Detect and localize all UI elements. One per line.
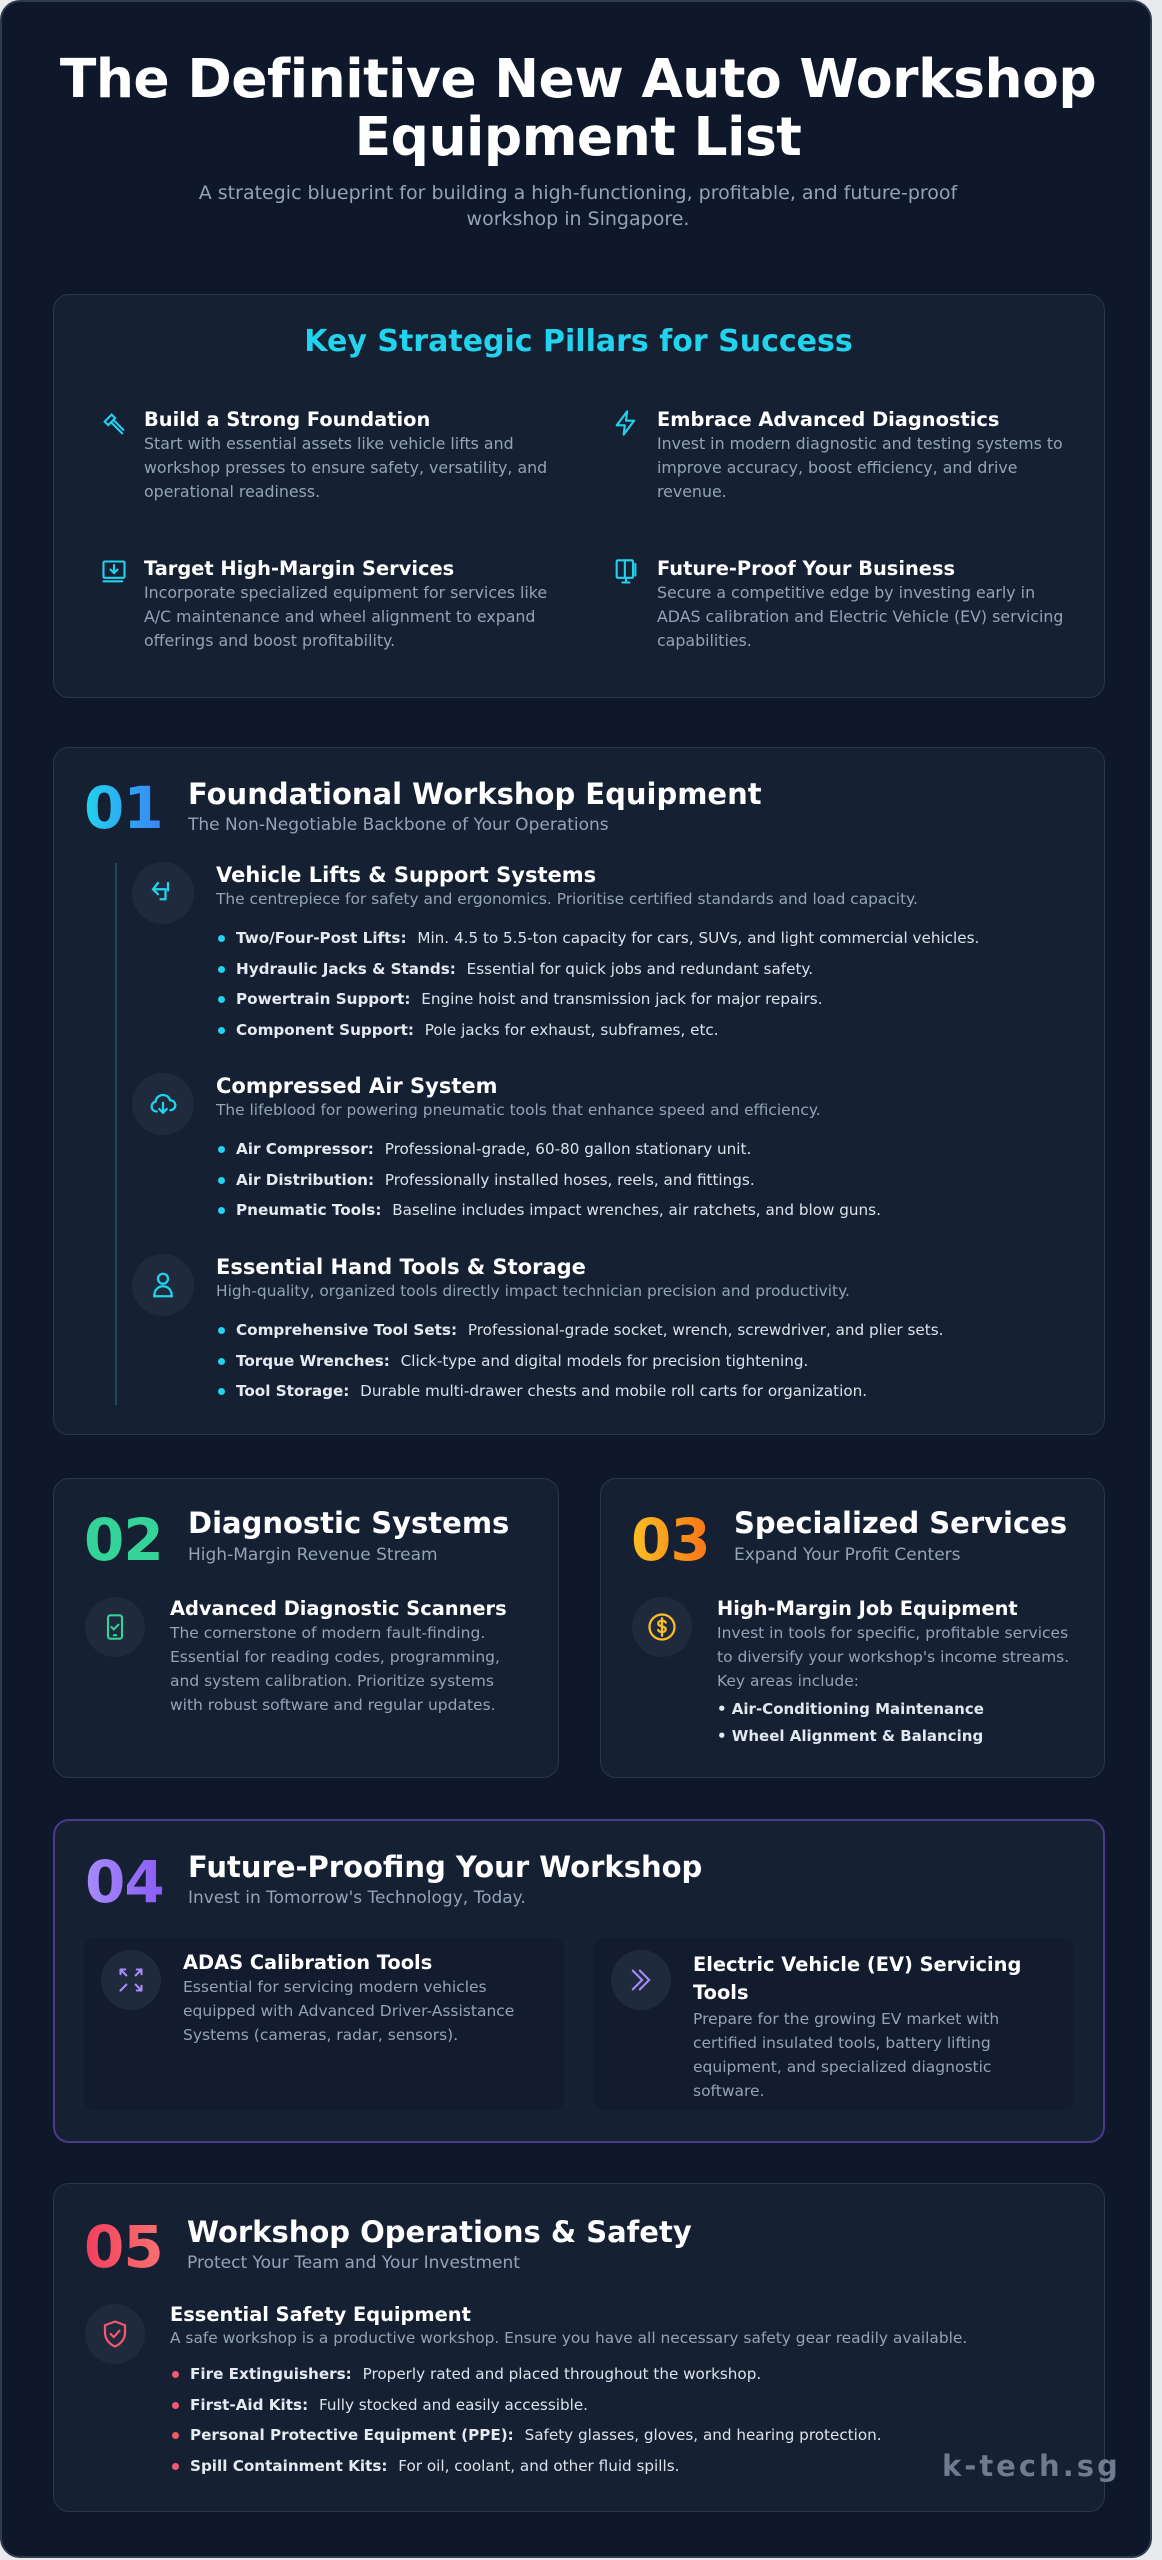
item: compressed air	[132, 1073, 881, 1219]
pillar: high-margin: Incorporate specialized equipment for services like A/C maintenance and wheel alignment to expand offerings and boost profitability.	[144, 583, 547, 650]
item: safety equipment: Fire Extinguishers: Properly rated and placed throughout the workshop.	[190, 2365, 761, 2383]
subtitle: A strategic blueprint for building a high-functioning, profitable, and future-proof workshop in Singapore.	[199, 182, 957, 230]
icon: phone	[85, 1597, 145, 1657]
item: hand tools: Comprehensive Tool Sets: Professional-grade socket, wrench, screwdriver, and plier sets.	[236, 1321, 943, 1339]
item: vehicle lifts: Two/Four-Post Lifts: Min. 4.5 to 5.5-ton capacity for cars, SUVs, and light commercial vehicles.	[236, 929, 979, 947]
item: vehicle lifts: Powertrain Support: Engine hoist and transmission jack for major repairs.	[236, 990, 823, 1008]
item: vehicle lifts: Hydraulic Jacks & Stands: Essential for quick jobs and redundant safety.	[236, 960, 813, 978]
icon: hammer	[103, 413, 124, 434]
section heading: Foundational Workshop Equipment	[188, 777, 762, 811]
item: compressed air: The lifeblood for powering pneumatic tools that enhance speed and efficiency.	[216, 1101, 821, 1119]
item: high-margin equipment: Invest in tools for specific, profitable services to diversify your workshop's income streams. Key areas include:	[717, 1624, 1069, 1690]
pillar: high-margin	[102, 557, 547, 650]
panel: 01 foundational	[53, 747, 1105, 1435]
panel: 02 diagnostic	[53, 1478, 559, 1778]
title: The Definitive New Auto Workshop	[60, 47, 1096, 110]
card: EV: Prepare for the growing EV market with certified insulated tools, battery lifting equipment, and specialized diagnostic software.	[693, 2010, 999, 2100]
item: vehicle lifts	[132, 862, 979, 1038]
item: scanners	[85, 1597, 507, 1714]
item: high-margin equipment: High-Margin Job Equipment	[717, 1597, 1018, 1620]
pillar: diagnostics	[616, 408, 1063, 501]
item: vehicle lifts: Component Support: Pole jacks for exhaust, subframes, etc.	[236, 1020, 719, 1038]
item: compressed air: Air Distribution: Professionally installed hoses, reels, and fittings.	[236, 1170, 755, 1188]
item: safety equipment: Spill Containment Kits: For oil, coolant, and other fluid spills.	[190, 2456, 679, 2474]
number 03: 03	[631, 1506, 710, 1574]
item: compressed air: Air Compressor: Professional-grade, 60-80 gallon stationary unit.	[236, 1140, 751, 1158]
item: safety equipment: Essential Safety Equipment	[170, 2303, 471, 2326]
card: ADAS	[84, 1938, 564, 2110]
pillar: foundation: Start with essential assets like vehicle lifts and workshop presses to ensure safety, versatility, and operational readiness.	[144, 434, 547, 501]
pillar: foundation	[103, 408, 547, 501]
panel: 03 specialized	[600, 1478, 1105, 1778]
item: safety equipment: First-Aid Kits: Fully stocked and easily accessible.	[190, 2396, 588, 2414]
icon: monitor	[616, 559, 636, 584]
heading: Diagnostic Systems	[188, 1506, 509, 1540]
pillar: future-proof	[616, 557, 1063, 650]
item: high-margin equipment: • Wheel Alignment & Balancing	[717, 1727, 983, 1745]
heading: Specialized Services	[734, 1506, 1067, 1540]
panel: key strategic pillars	[53, 294, 1105, 698]
item: hand tools: Tool Storage: Durable multi-drawer chests and mobile roll carts for organization.	[236, 1382, 867, 1400]
pillar: diagnostics: Invest in modern diagnostic and testing systems to improve accuracy, boost efficiency, and drive revenue.	[657, 434, 1063, 501]
title: Equipment List	[355, 105, 801, 168]
icon: shield	[85, 2304, 145, 2364]
heading: Workshop Operations & Safety	[187, 2215, 692, 2249]
card: ADAS: Essential for servicing modern vehicles equipped with Advanced Driver-Assistance Systems (cameras, radar, sensors).	[183, 1978, 514, 2044]
item: high-margin equipment: • Air-Conditioning Maintenance	[717, 1700, 984, 1718]
watermark: k-tech.sg	[942, 2449, 1121, 2483]
pillar: high-margin: Target High-Margin Services	[144, 557, 454, 580]
item: scanners: Advanced Diagnostic Scanners	[170, 1597, 507, 1620]
icon: lightning	[616, 410, 636, 436]
pillar: future-proof: Secure a competitive edge by investing early in ADAS calibration and Electric Vehicle (EV) servicing capabilities.	[657, 583, 1063, 650]
icon: lift	[132, 862, 194, 924]
card: EV: Electric Vehicle (EV) Servicing Tools	[693, 1953, 1021, 2004]
item: safety equipment: Personal Protective Equipment (PPE): Safety glasses, gloves, and hearing protection.	[190, 2426, 882, 2444]
item: scanners: The cornerstone of modern fault-finding. Essential for reading codes, programming, and system calibration. Prioritize systems with robust software and regular updates.	[170, 1624, 500, 1714]
panel: 04 future-proofing	[53, 1819, 1105, 2143]
icon: dollar	[632, 1597, 692, 1657]
icon: screen	[102, 560, 126, 582]
pillar: foundation: Build a Strong Foundation	[144, 408, 430, 431]
icon: person	[132, 1254, 194, 1316]
pillars heading: Key Strategic Pillars for Success	[304, 324, 853, 359]
item: vehicle lifts: The centrepiece for safety and ergonomics. Prioritise certified standards and load capacity.	[216, 890, 918, 908]
pillar: future-proof: Future-Proof Your Business	[657, 557, 955, 580]
item: hand tools: Essential Hand Tools & Storage	[216, 1255, 586, 1279]
panel: 05 operations & safety	[53, 2183, 1105, 2512]
icon: cloud download	[132, 1073, 194, 1135]
item: safety equipment: A safe workshop is a productive workshop. Ensure you have all necessary safety gear readily available.	[170, 2329, 967, 2347]
heading: Future-Proofing Your Workshop	[188, 1850, 702, 1884]
item: hand tools: Torque Wrenches: Click-type and digital models for precision tightening.	[236, 1352, 808, 1370]
item: hand tools: High-quality, organized tools directly impact technician precision and productivity.	[216, 1282, 850, 1300]
icon: arrows	[101, 1950, 161, 2010]
number 05: 05	[84, 2213, 163, 2281]
item: hand tools	[132, 1254, 943, 1400]
icon: chevrons	[611, 1950, 671, 2010]
item: high-margin equipment	[632, 1597, 1069, 1745]
item: compressed air: Compressed Air System	[216, 1074, 498, 1098]
subtitle: Invest in Tomorrow's Technology, Today.	[188, 1888, 526, 1908]
item: compressed air: Pneumatic Tools: Baseline includes impact wrenches, air ratchets, and blow guns.	[236, 1201, 881, 1219]
title	[60, 47, 1096, 168]
subtitle: Protect Your Team and Your Investment	[187, 2253, 520, 2273]
number 04: 04	[85, 1848, 164, 1916]
section subtitle: The Non-Negotiable Backbone of Your Operations	[188, 815, 609, 835]
number 01: 01	[84, 774, 163, 842]
number 02: 02	[84, 1506, 163, 1574]
card: ADAS: ADAS Calibration Tools	[183, 1951, 432, 1974]
card: EV	[594, 1938, 1074, 2110]
pillar: diagnostics: Embrace Advanced Diagnostics	[657, 408, 999, 431]
item: vehicle lifts: Vehicle Lifts & Support Systems	[216, 863, 596, 887]
item: safety equipment	[85, 2303, 967, 2474]
subtitle: Expand Your Profit Centers	[734, 1545, 960, 1565]
subtitle: High-Margin Revenue Stream	[188, 1545, 438, 1565]
